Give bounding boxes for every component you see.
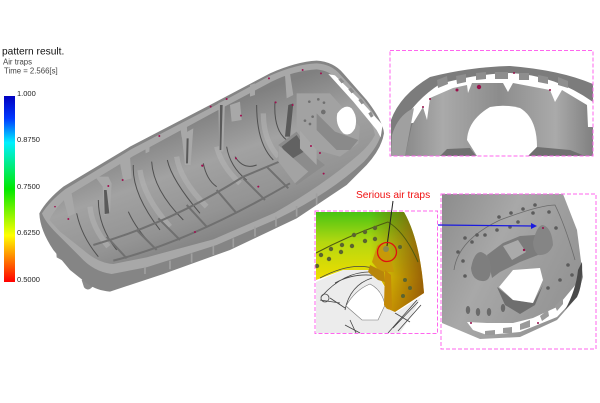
lower feet: [56, 248, 94, 289]
air trap dots: [470, 227, 544, 324]
vent holes: [456, 203, 574, 290]
round opening: [337, 107, 356, 135]
vent holes: [315, 226, 412, 298]
inner wall: [405, 83, 593, 156]
box structure: [278, 132, 325, 185]
dashed frame: [315, 211, 438, 334]
inner arc ribs: [77, 102, 287, 257]
inner raised ridge: [454, 205, 575, 270]
lower slot with teeth: [467, 283, 578, 335]
rim highlight: [42, 63, 381, 274]
right boss: [533, 225, 553, 255]
screw holes: [304, 98, 326, 125]
label: air traps and time: Air traps: [3, 58, 32, 66]
callout: serious air traps: Serious air traps: [356, 190, 430, 201]
colour scale legend: 0.8750: [17, 135, 40, 144]
callout: serious air traps: [356, 190, 430, 262]
central opening: [499, 268, 543, 303]
panel: yellow flow result close-up: [315, 211, 438, 334]
pale lower wireframe part: [316, 270, 421, 333]
arrow: blue pointer to boss: [438, 223, 537, 229]
shell outline: [39, 61, 384, 292]
colour scale legend: [4, 89, 40, 284]
light wall sheen: [90, 113, 278, 247]
lower oval slots: [466, 304, 505, 316]
air trap dots: [422, 72, 551, 108]
callout leader arrow: [387, 201, 393, 246]
label: air traps and time: Time = 2.566[s]: [4, 66, 58, 76]
inner cavity: [49, 69, 375, 264]
left band: [391, 108, 414, 156]
wireframe lower part: [320, 266, 421, 333]
panel: top right close-up: [390, 50, 593, 156]
upper rim teeth: [437, 72, 568, 88]
recess: [487, 235, 538, 278]
shaded lower rim of opening: [497, 285, 543, 314]
dashed frame: [390, 50, 593, 156]
outer rim: [391, 66, 593, 156]
white opening: [467, 106, 537, 156]
heading: pattern result: pattern result.: [2, 46, 64, 58]
upper wall tabs: [63, 73, 293, 217]
end wall block with hole: [297, 93, 360, 157]
air trap dots: [54, 69, 325, 233]
dark tab shading: [104, 103, 293, 214]
label: air traps and time: [3, 58, 58, 76]
dashed frame: [441, 194, 596, 349]
boss: [372, 244, 394, 272]
rim curve: [316, 222, 418, 262]
white gap band: [402, 73, 593, 135]
left boss: [471, 252, 491, 281]
outer side panel ribs: [145, 193, 317, 274]
main part: grey shell with ribs: [39, 61, 384, 292]
colour scale legend: 0.7500: [17, 182, 40, 191]
white opening: [346, 284, 385, 320]
colour scale legend: 0.6250: [17, 228, 40, 237]
colour scale legend: 0.5000: [17, 275, 40, 284]
floor grid ribs: [93, 160, 290, 261]
callout red circle: [378, 242, 396, 262]
colour scale legend: 1.000: [17, 89, 36, 98]
panel: right close-up of bottom view: [441, 194, 596, 349]
slots at the end wall: [328, 74, 383, 137]
